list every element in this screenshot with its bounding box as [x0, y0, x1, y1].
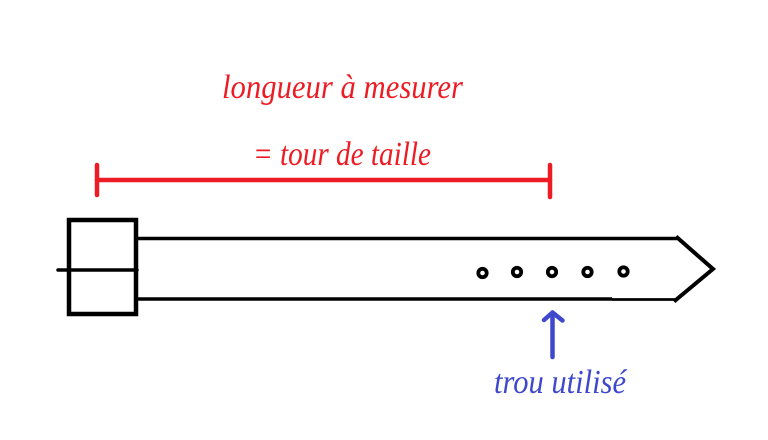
belt	[58, 220, 713, 314]
belt buckle	[58, 220, 137, 314]
red measurement bracket	[97, 165, 550, 197]
arrow pointing to used hole	[544, 312, 562, 357]
belt holes	[478, 267, 628, 277]
subtitle: waist size: = tour de taille	[253, 136, 431, 173]
belt strap with pointed tip	[137, 236, 713, 302]
label: used hole: trou utilisé	[494, 364, 628, 401]
title: length to measure: longueur à mesurer	[222, 69, 464, 106]
